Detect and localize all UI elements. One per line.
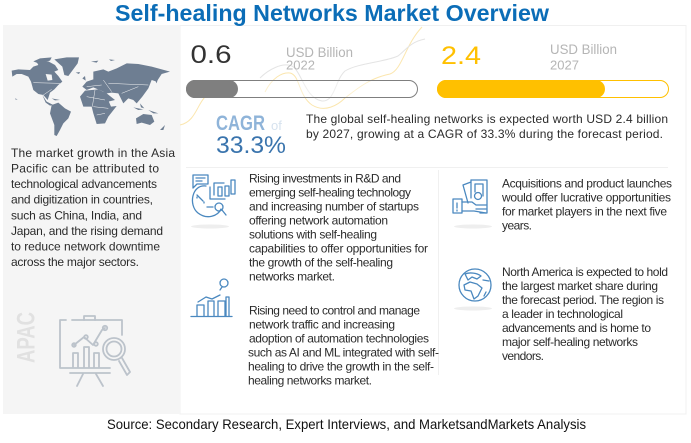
value: 2022: 0.6 — [190, 41, 232, 69]
text: APAC description: and digitization in countries, — [11, 192, 153, 206]
text: market summary — [306, 112, 668, 141]
text: driver one: Rising investments in R&D and — [249, 172, 401, 186]
text: APAC description: Pacific can be attributed to — [11, 162, 159, 176]
text: driver one: solutions with self-healing — [249, 228, 377, 242]
main content frame — [180, 26, 686, 414]
CAGR callout: 33.3% — [216, 132, 286, 159]
text: APAC description: The market growth in the Asia — [11, 146, 175, 160]
text: APAC description — [11, 146, 175, 269]
text: market summary: by 2027, growing at a CAGR of 33.3% during the forecast period. — [306, 127, 663, 141]
text: market summary: The global self-healing networks is expected worth USD 2.4 billion — [306, 112, 668, 126]
text: driver one — [249, 172, 428, 284]
text: driver one: capabilities to offer opportunities for — [249, 242, 428, 256]
text: driver one: emerging self-healing technology — [249, 186, 411, 200]
CAGR callout: of — [271, 118, 282, 133]
source note: Source: Secondary Research, Expert Interviews, and MarketsandMarkets Analysis — [107, 416, 586, 432]
value: 2027: 2027 — [550, 58, 579, 72]
label: APAC vertical: APAC — [12, 312, 40, 363]
text: driver two: such as AI and ML integrated with self- — [248, 346, 439, 360]
text: opportunity: for market players in the next five — [502, 204, 667, 218]
value: 2027: USD Billion — [550, 41, 617, 57]
CAGR callout — [216, 112, 286, 159]
text: regional outlook: the largest market share during — [502, 279, 658, 293]
progress bar: 2027 — [437, 80, 668, 98]
icon: hand with money — [453, 180, 492, 228]
icon: presentation board with magnifier — [60, 316, 130, 386]
panel: APAC — [3, 25, 180, 414]
text: driver one: offering network automation — [249, 214, 388, 228]
text: regional outlook — [502, 265, 668, 363]
text: driver two: healing networks market. — [248, 374, 372, 388]
text: driver two: network traffic and increasing — [249, 318, 395, 332]
value: 2022 — [190, 41, 353, 72]
text: regional outlook: the forecast period. The region is — [502, 293, 664, 307]
text: driver one: and increasing number of startups — [249, 200, 419, 214]
text: opportunity — [501, 176, 672, 232]
text: APAC description: to reduce network downtime — [11, 240, 160, 254]
text: regional outlook: a leader in technological — [502, 307, 623, 321]
value: 2027: 2.4 — [441, 42, 481, 70]
icon: analytics — [191, 175, 235, 228]
icon: globe — [454, 269, 492, 310]
title: Self-healing Networks Market Overview — [115, 0, 549, 26]
value: 2027 — [441, 41, 617, 72]
progress bar: 2022 — [186, 80, 418, 98]
value: 2022: USD Billion — [286, 44, 353, 60]
text: driver two — [248, 304, 439, 388]
text: regional outlook: advancements and is home to — [502, 321, 651, 335]
icon: growth chart — [191, 279, 232, 316]
text: APAC description: Japan, and the rising demand — [11, 224, 163, 238]
text: opportunity: years. — [502, 218, 532, 232]
text: driver one: the growth of the self-healing — [249, 256, 393, 270]
text: APAC description: technological advancements — [11, 177, 157, 191]
text: driver two: adoption of automation technologies — [249, 332, 429, 346]
text: APAC description: across the major sectors. — [11, 255, 139, 269]
text: driver two: Rising need to control and manage — [249, 304, 420, 318]
text: regional outlook: major self-healing networks — [502, 335, 638, 349]
icon: world map — [12, 57, 170, 136]
decorative swoosh lines — [180, 27, 425, 125]
text: regional outlook: vendors. — [502, 349, 544, 363]
text: opportunity: Acquisitions and product launches — [502, 176, 672, 190]
text: APAC description: such as China, India, and — [11, 208, 142, 222]
value: 2022: 2022 — [286, 58, 315, 72]
text: driver one: networks market. — [249, 270, 335, 284]
CAGR callout: CAGR — [216, 112, 265, 135]
text: regional outlook: North America is expected to hold — [502, 265, 668, 279]
text: opportunity: would offer lucrative opportunities — [501, 190, 671, 204]
text: driver two: healing to drive the growth in the self- — [248, 360, 434, 374]
